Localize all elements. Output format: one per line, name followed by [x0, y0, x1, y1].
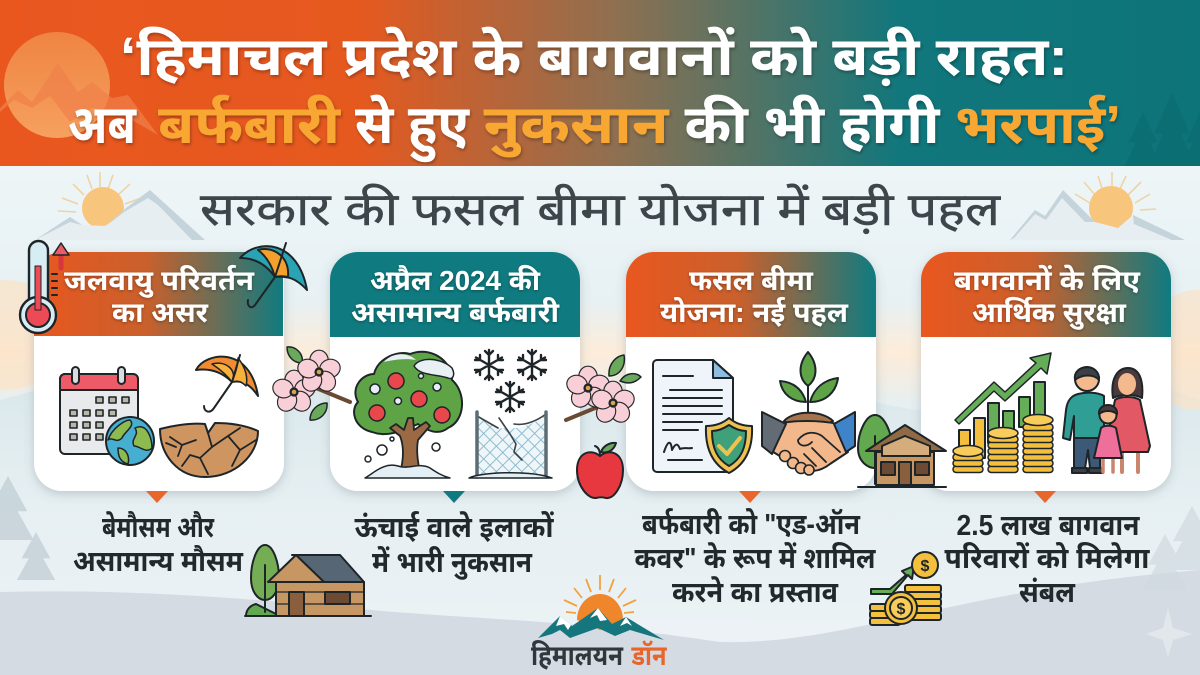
icon: handshake holding soil	[762, 412, 855, 475]
caption: card 2: ऊंचाई वाले इलाकों	[354, 510, 554, 544]
title line 2: बर्फबारी	[158, 94, 341, 155]
caption: card 1: असामान्य मौसम	[73, 545, 244, 578]
caption: card 4: संबल	[1019, 577, 1076, 609]
pointer: card 4	[1034, 491, 1056, 503]
heading: का असर	[112, 297, 209, 328]
icon: wooden house between cards	[858, 415, 946, 487]
heading	[351, 264, 560, 328]
card header	[626, 252, 876, 337]
icon: umbrella	[196, 355, 258, 412]
heading: जलवायु परिवर्तन	[64, 264, 255, 298]
card body	[34, 252, 284, 491]
icon: sprout	[780, 352, 838, 414]
icon: house with solar roof	[245, 545, 371, 616]
heading: अप्रैल 2024 की	[370, 264, 541, 296]
title line 2: नुकसान	[484, 95, 670, 159]
card header	[330, 252, 580, 337]
icon: thermometer	[20, 241, 69, 333]
heading: आर्थिक सुरक्षा	[972, 296, 1127, 330]
panel: climate change	[34, 252, 284, 491]
icon: coin stacks	[953, 414, 1053, 472]
subtitle: सरकार की फसल बीमा योजना में बड़ी पहल	[200, 183, 1001, 235]
icon: growth arrow	[955, 353, 1051, 424]
icon: coins and growth arrow: $	[921, 558, 930, 575]
logo snow caps	[556, 608, 632, 630]
card header	[34, 252, 284, 336]
caption: card 3	[634, 508, 876, 609]
icon: apple	[577, 443, 623, 498]
background: left pine trees	[0, 476, 55, 580]
background: pale sky	[0, 167, 1200, 675]
caption: card 3: बर्फबारी को "एड-ऑन	[642, 508, 861, 541]
icon: calendar	[60, 367, 138, 454]
icon: right blossom branch	[564, 355, 641, 426]
title line 2: भरपाई’	[955, 94, 1121, 155]
card body	[921, 252, 1171, 491]
title line 2: अब	[68, 95, 137, 155]
logo mountains	[538, 608, 664, 640]
icon: left blossom branch	[270, 347, 350, 420]
icon: faint sparkle	[1146, 608, 1192, 658]
caption: card 2: में भारी नुकसान	[372, 546, 533, 580]
logo sun	[577, 594, 623, 630]
header band	[0, 0, 1200, 168]
logo wordmark: हिमालयन	[531, 639, 624, 671]
icon: apple tree in snow	[354, 352, 462, 478]
caption: card 2	[354, 510, 554, 580]
logo wordmark: डॉन	[631, 639, 667, 671]
icon: coins and growth arrow	[870, 552, 941, 625]
icon: coins and growth arrow: $	[897, 601, 906, 618]
caption: card 3: करने का प्रस्ताव	[672, 575, 838, 609]
icon: snowflakes	[475, 350, 546, 412]
pointer: card 3	[739, 491, 761, 503]
caption: card 4: 2.5 लाख बागवान	[956, 510, 1141, 542]
title line 2: से हुए	[355, 94, 470, 163]
pointer: card 1	[146, 491, 168, 503]
heading	[64, 264, 255, 328]
card body	[626, 252, 876, 491]
title line 2: की भी होगी	[684, 94, 941, 155]
icon: policy document	[653, 360, 733, 472]
panel: April 2024 snowfall	[330, 252, 580, 491]
icon: torn hail net	[469, 412, 552, 478]
icon: right sun and mountains	[1010, 172, 1185, 240]
icon: growth bars	[959, 382, 1045, 460]
pointer: card 2	[443, 491, 465, 503]
heading: फसल बीमा	[689, 264, 814, 296]
heading: योजना: नई पहल	[660, 296, 849, 328]
heading: असामान्य बर्फबारी	[351, 296, 560, 328]
caption: card 1	[73, 510, 244, 578]
caption: card 1: बेमौसम और	[102, 510, 215, 544]
icon: left sun and mountains	[35, 172, 205, 240]
icon: globe	[106, 417, 154, 465]
panel: financial security	[921, 252, 1171, 491]
logo: Himalayan Dawn	[531, 575, 667, 671]
heading	[660, 264, 849, 328]
caption: card 3: कवर" के रूप में शामिल	[634, 541, 876, 575]
card header	[921, 252, 1171, 337]
background: right pine trees	[1143, 506, 1200, 590]
background: misty hills	[0, 280, 1200, 675]
logo sun rays	[564, 575, 636, 613]
icon: family	[1063, 367, 1150, 473]
title	[68, 26, 1121, 163]
caption: card 4: परिवारों को मिलेगा	[944, 541, 1150, 575]
icon: large umbrella	[240, 243, 307, 307]
icon: cracked soil	[160, 423, 258, 477]
heading	[954, 263, 1141, 330]
caption: card 4	[944, 510, 1150, 609]
panel: crop insurance scheme	[626, 252, 876, 491]
icon: shield with check	[706, 418, 752, 473]
heading: बागवानों के लिए	[954, 263, 1141, 296]
title line 2	[68, 94, 1121, 163]
card body	[330, 252, 580, 491]
title line 1: ‘हिमाचल प्रदेश के बागवानों को बड़ी राहत:	[120, 26, 1068, 87]
